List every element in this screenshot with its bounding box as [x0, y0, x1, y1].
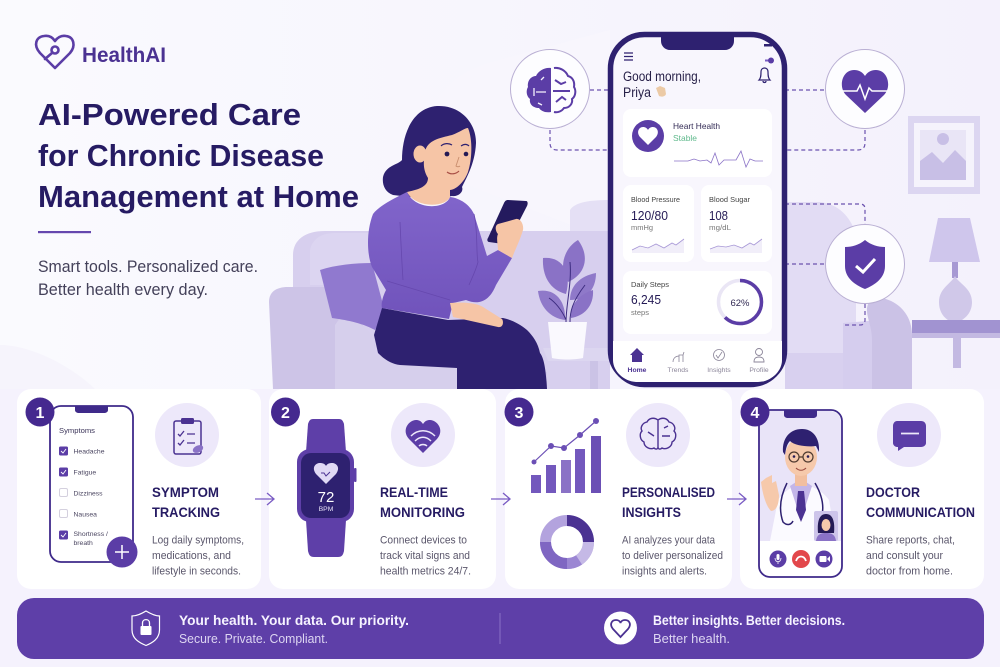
icon: trends	[673, 352, 684, 362]
arrow: step 2 to 3	[491, 493, 510, 505]
banner message right	[653, 612, 845, 646]
bottom navigation: Profile	[749, 367, 769, 374]
card: blood sugar: mg/dL	[709, 223, 731, 232]
step title: INSIGHTS	[622, 504, 681, 520]
step number 3	[504, 398, 534, 426]
connector lines	[550, 90, 865, 325]
bottom navigation	[613, 341, 782, 382]
icon: chat bubble	[877, 403, 941, 467]
card: daily steps	[623, 271, 772, 334]
room illustration: wall decor and furniture	[269, 116, 1000, 389]
patient thumbnail	[814, 511, 838, 541]
subtitle: Better health every day.	[38, 281, 208, 299]
step title: MONITORING	[380, 504, 465, 520]
icon: shield lock	[132, 611, 160, 646]
eyes and mouth	[441, 144, 469, 174]
hand holding phone	[496, 219, 523, 258]
step description: AI analyzes your data	[622, 534, 716, 546]
step title: TRACKING	[152, 504, 220, 520]
card: heart health: Stable	[673, 133, 697, 143]
step card 2: real-time monitoring	[269, 389, 496, 589]
face and neck	[407, 128, 471, 205]
card: heart health	[623, 109, 772, 177]
title: for Chronic Disease	[38, 138, 324, 173]
step description: Connect devices to	[380, 534, 467, 546]
call buttons	[770, 550, 832, 568]
step description: and consult your	[866, 550, 943, 562]
icon: heart signal	[391, 403, 455, 467]
smartwatch: BPM	[319, 506, 334, 513]
picture frame	[908, 116, 980, 194]
banner message right: Better health.	[653, 631, 730, 646]
subtitle	[38, 258, 258, 299]
card: blood sugar	[701, 185, 772, 262]
pants	[374, 308, 547, 389]
card: blood pressure: mmHg	[631, 223, 653, 232]
icon: bell	[759, 68, 770, 82]
step description: track vital signs and	[380, 550, 470, 562]
greeting: Priya	[623, 85, 651, 100]
step title: REAL-TIME	[380, 484, 448, 500]
lamp	[929, 218, 980, 320]
step description: to deliver personalized	[622, 550, 723, 562]
card: daily steps: steps	[631, 308, 649, 317]
banner message right: Better insights. Better decisions.	[653, 612, 845, 628]
bar and line chart	[531, 418, 601, 493]
feature circle: security	[826, 224, 904, 304]
footer banner	[17, 598, 984, 659]
phone body	[610, 34, 784, 384]
icon: insights	[714, 350, 724, 360]
step title: PERSONALISED	[622, 484, 715, 500]
woman with phone	[368, 106, 547, 389]
step title	[152, 484, 220, 520]
plant table	[543, 348, 610, 389]
card: heart health: Heart Health	[673, 121, 720, 131]
banner message left: Secure. Private. Compliant.	[179, 631, 328, 646]
smartphone	[487, 200, 528, 245]
step title	[380, 484, 465, 520]
side table	[912, 320, 1000, 368]
icon: menu	[624, 53, 633, 60]
arrow: step 1 to 2	[255, 493, 274, 505]
step description: health metrics 24/7.	[380, 566, 471, 578]
step number 1: 1	[36, 405, 45, 422]
symptom phone: Dizziness	[74, 490, 103, 498]
card: blood pressure: Blood Pressure	[631, 195, 680, 204]
step card 3: personalised insights	[504, 389, 732, 589]
card: blood sugar: Blood Sugar	[709, 195, 750, 204]
icon: home	[630, 348, 644, 362]
smartwatch	[297, 419, 356, 557]
greeting: Good morning,	[623, 69, 701, 84]
step number 2: 2	[281, 405, 290, 422]
icon: waving hand	[656, 86, 666, 97]
step number 3: 3	[515, 405, 524, 422]
step card 1: symptom tracking	[17, 389, 261, 589]
step description	[622, 534, 723, 578]
step title: COMMUNICATION	[866, 504, 975, 520]
logo	[36, 36, 166, 68]
step description: insights and alerts.	[622, 566, 707, 578]
symptom phone: Nausea	[74, 512, 97, 518]
step description	[866, 534, 955, 578]
card: blood sugar: 108	[709, 208, 728, 223]
symptom phone	[50, 406, 133, 562]
title	[38, 97, 359, 214]
hair	[383, 106, 476, 198]
step description: Log daily symptoms,	[152, 534, 244, 546]
banner message left	[179, 612, 409, 646]
step number 4: 4	[751, 405, 760, 422]
plant pot	[548, 322, 587, 360]
doctor	[761, 429, 836, 541]
step title: DOCTOR	[866, 484, 920, 500]
step description	[152, 534, 244, 578]
step description: medications, and	[152, 550, 231, 562]
bottom navigation: Insights	[707, 367, 731, 374]
add button	[106, 536, 138, 568]
icon: profile	[754, 348, 764, 362]
step description: doctor from home.	[866, 566, 953, 578]
sofa pillow	[320, 263, 385, 330]
arrow: step 3 to 4	[727, 493, 746, 505]
greeting	[623, 69, 701, 100]
symptom phone: Shortness /	[74, 531, 108, 538]
notch	[661, 34, 734, 50]
banner message left: Your health. Your data. Our priority.	[179, 612, 409, 628]
symptom phone: breath	[74, 540, 93, 547]
symptom phone: Headache	[74, 448, 105, 456]
sweater	[368, 192, 512, 319]
feature circle: heart rate	[826, 50, 904, 128]
bottom navigation: Home	[628, 367, 647, 374]
icon: heart pulse	[842, 70, 888, 113]
logo wordmark: HealthAI	[82, 43, 166, 67]
card: daily steps: Daily Steps	[631, 280, 669, 289]
video call phone	[759, 410, 842, 577]
symptom phone: Symptoms	[59, 426, 95, 435]
smartwatch: 72	[318, 489, 334, 506]
step description: lifestyle in seconds.	[152, 566, 241, 578]
step number 4	[740, 398, 770, 426]
card: blood pressure	[623, 185, 694, 262]
ear	[414, 146, 426, 162]
sofa	[269, 200, 912, 389]
plant	[538, 240, 596, 360]
hand on lap	[450, 303, 503, 327]
subtitle: Smart tools. Personalized care.	[38, 258, 258, 276]
step number 2	[271, 398, 300, 426]
sofa left armrest	[269, 287, 375, 389]
card: daily steps: 6,245	[631, 292, 661, 307]
step title	[866, 484, 975, 520]
step title	[622, 484, 715, 520]
step title: SYMPTOM	[152, 484, 219, 500]
main phone	[610, 34, 784, 384]
icon: brain	[527, 68, 575, 112]
card: daily steps: 62%	[730, 298, 750, 309]
card: blood pressure: 120/80	[631, 208, 668, 223]
title: AI-Powered Care	[38, 97, 301, 132]
donut chart	[546, 520, 589, 564]
title: Management at Home	[38, 179, 359, 214]
icon: clipboard	[155, 403, 219, 467]
title underline	[38, 231, 91, 233]
icon: shield check	[845, 240, 885, 289]
bottom navigation: Trends	[668, 367, 689, 374]
icon: logo heart	[36, 36, 73, 68]
step card 4: doctor communication	[740, 389, 984, 589]
step description	[380, 534, 471, 578]
symptom phone: Fatigue	[74, 470, 96, 476]
icon: heart badge	[604, 612, 637, 644]
icon: brain outline	[626, 403, 690, 467]
step description: Share reports, chat,	[866, 534, 955, 546]
feature circle: AI brain	[510, 50, 590, 128]
step number 1	[26, 398, 54, 426]
